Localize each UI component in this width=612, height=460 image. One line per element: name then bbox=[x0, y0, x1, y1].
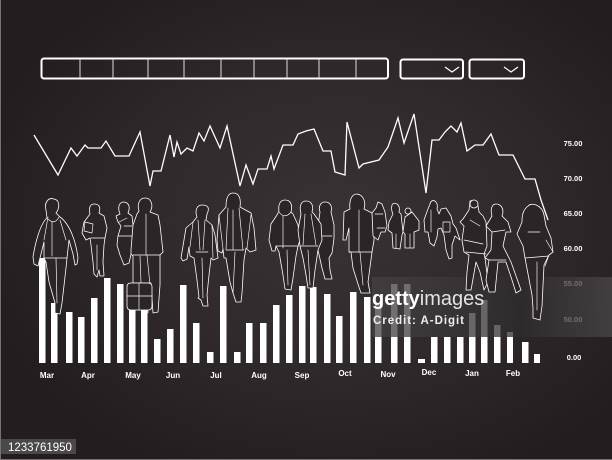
distant couple right bbox=[424, 201, 460, 259]
watermark band bbox=[372, 277, 612, 337]
month labels: Jan bbox=[465, 369, 479, 378]
tall woman with long hair bbox=[517, 204, 553, 320]
month labels: May bbox=[125, 371, 141, 380]
man in suit with suitcase bbox=[127, 198, 163, 313]
image id tag bbox=[1, 439, 76, 454]
watermark text: Credit: A-Digit bbox=[373, 315, 464, 327]
line chart bbox=[34, 114, 548, 220]
man in hoodie bbox=[269, 200, 300, 290]
y axis labels: 65.00 bbox=[564, 209, 582, 218]
person with backpack bbox=[33, 199, 78, 314]
person with child on shoulders bbox=[460, 200, 488, 290]
distant head and person one bbox=[372, 202, 387, 240]
y axis labels: 60.00 bbox=[564, 244, 582, 253]
dropdown two bbox=[470, 60, 524, 78]
woman walking right bbox=[318, 202, 334, 279]
month labels: Sep bbox=[295, 371, 309, 380]
month labels: Feb bbox=[506, 369, 520, 378]
distant small figures bbox=[372, 201, 460, 259]
segmented toolbar bbox=[42, 58, 388, 78]
woman in skirt bbox=[485, 204, 521, 293]
month labels: Dec bbox=[422, 368, 437, 377]
image id tag: 1233761950 bbox=[8, 442, 72, 454]
man in jacket bbox=[181, 205, 218, 306]
y axis labels: 70.00 bbox=[564, 174, 582, 183]
month labels bbox=[40, 368, 520, 380]
bar chart bbox=[39, 258, 540, 363]
month labels: Jun bbox=[166, 371, 180, 380]
y axis labels bbox=[564, 139, 582, 362]
distant couple left bbox=[388, 203, 419, 249]
month labels: Aug bbox=[251, 371, 267, 380]
watermark text: gettyimages bbox=[372, 288, 484, 310]
watermark text bbox=[372, 288, 484, 327]
woman on phone bbox=[116, 202, 133, 265]
woman with book bbox=[82, 204, 107, 277]
man from behind in suit bbox=[343, 194, 374, 293]
month labels: Jul bbox=[210, 371, 222, 380]
dropdown one bbox=[400, 60, 463, 78]
y axis labels: 55.00 bbox=[564, 279, 582, 288]
y axis labels: 75.00 bbox=[564, 139, 582, 148]
month labels: Oct bbox=[338, 369, 352, 378]
people walking bbox=[33, 193, 553, 320]
month labels: Apr bbox=[81, 371, 95, 380]
man in centre of group bbox=[298, 201, 322, 288]
y axis labels: 0.00 bbox=[567, 353, 581, 362]
large man walking bbox=[217, 193, 256, 302]
month labels: Mar bbox=[40, 371, 54, 380]
month labels: Nov bbox=[380, 370, 396, 379]
y axis labels: 50.00 bbox=[564, 315, 582, 324]
